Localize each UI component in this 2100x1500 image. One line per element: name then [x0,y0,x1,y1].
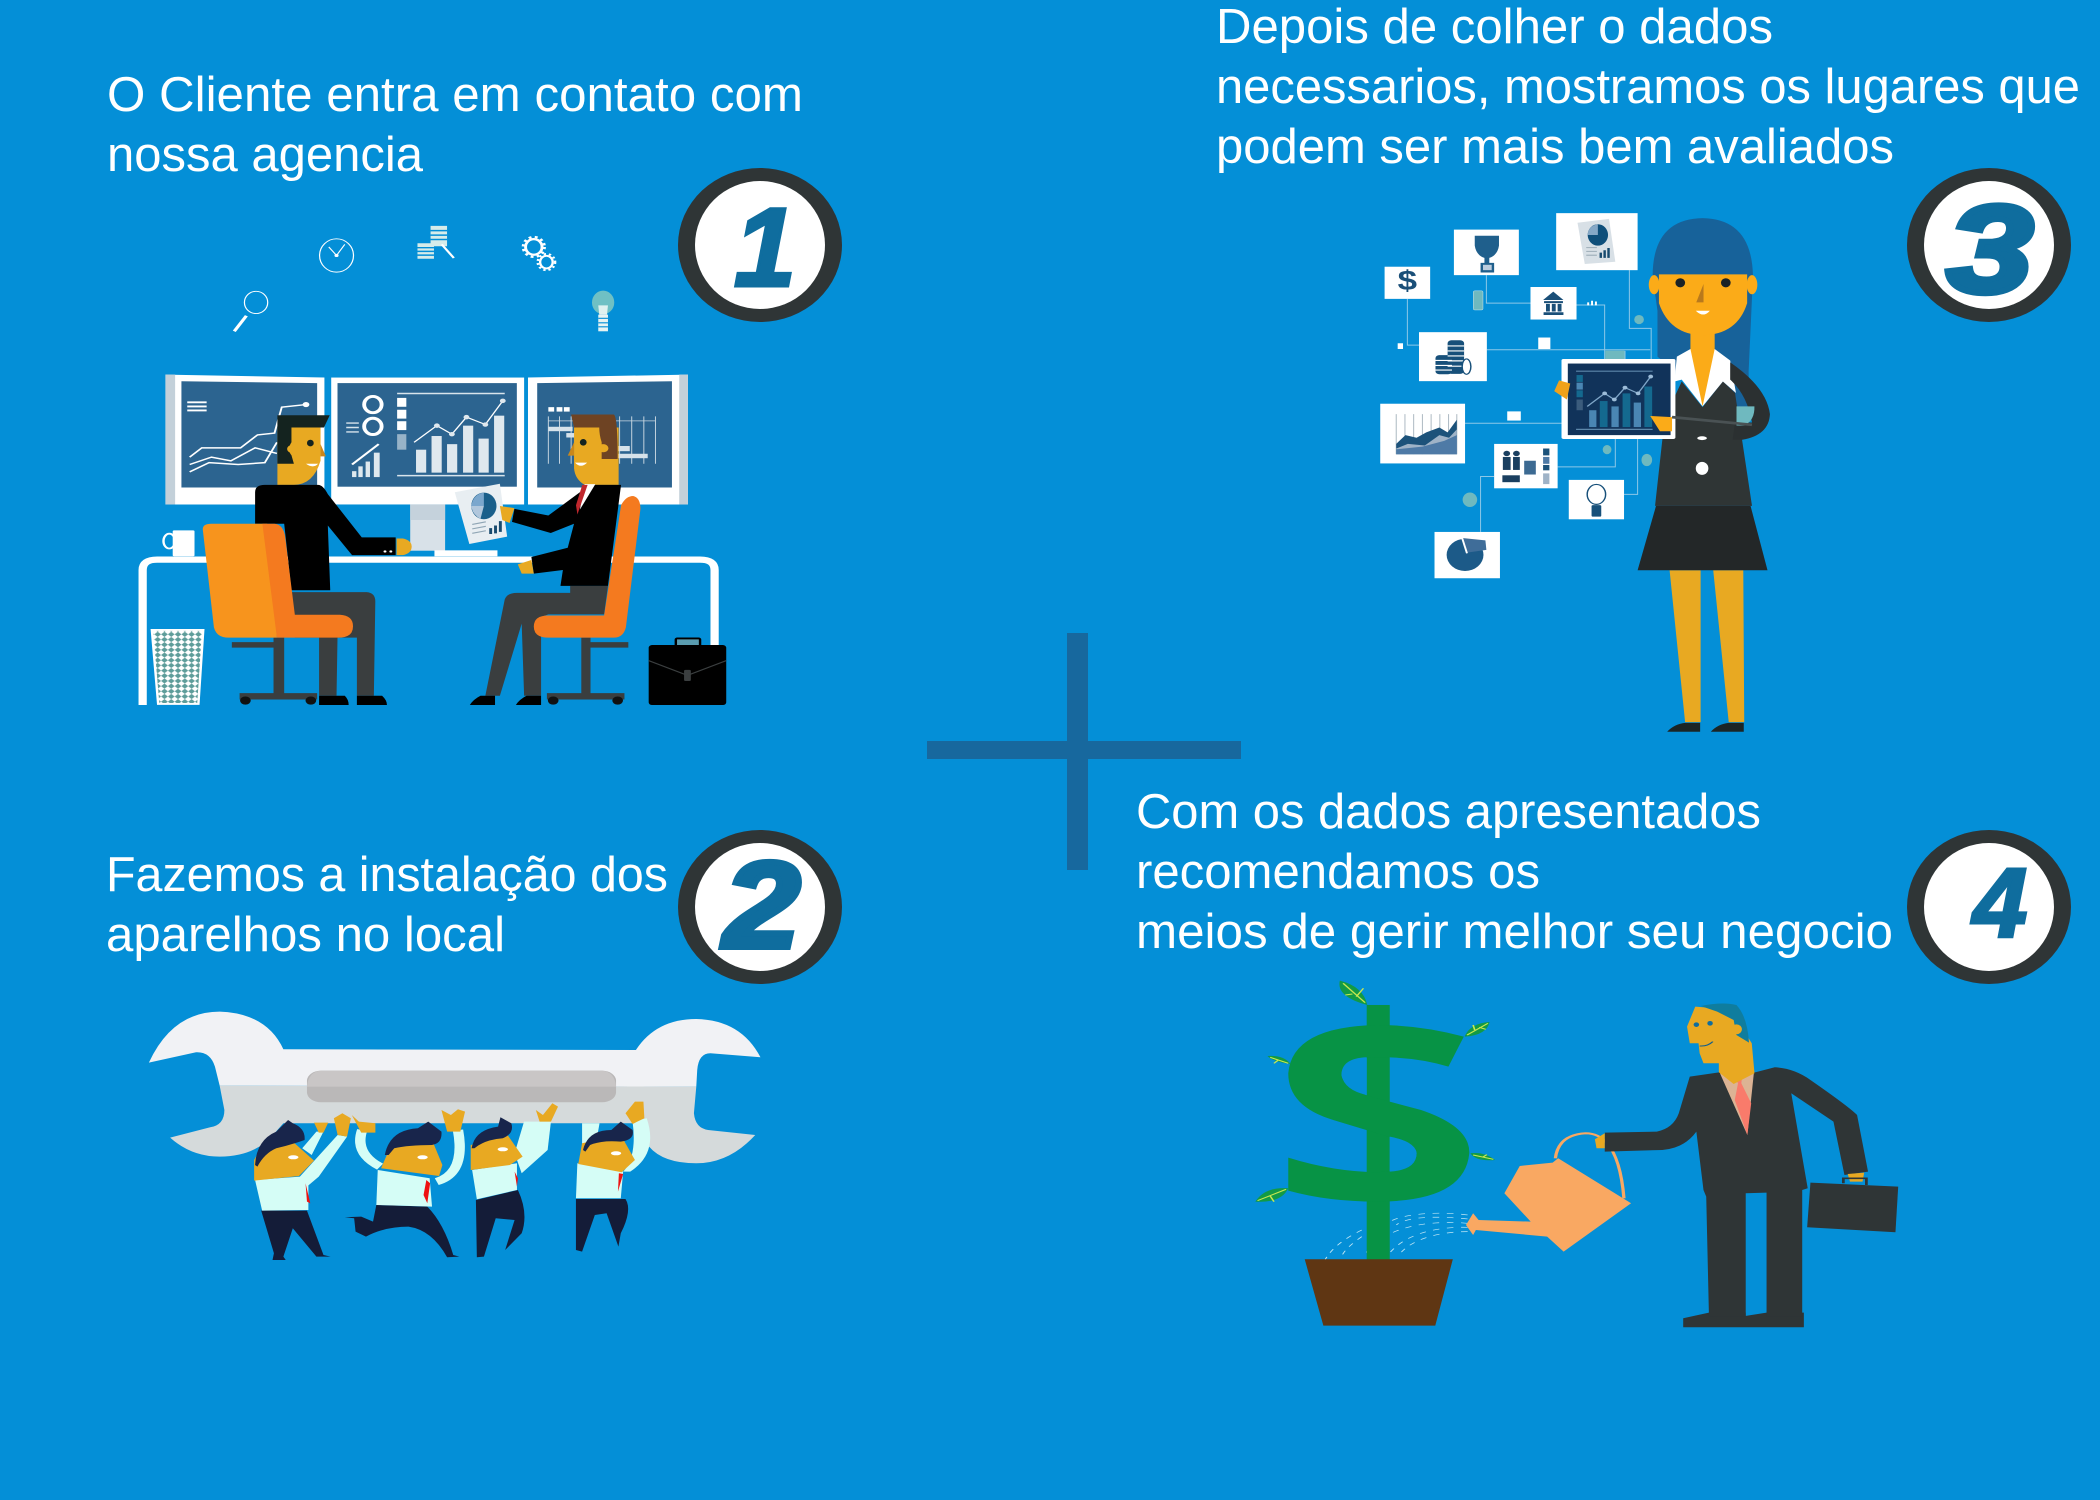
flower pot [1305,1259,1453,1326]
card: bank [1530,287,1577,320]
card: trophy [1454,230,1519,275]
small teal icons [1463,291,1652,507]
businessman briefcase [1807,1178,1898,1232]
heading: step 4: recomendamos os [1136,845,1540,899]
number badge 4 [1907,830,2071,984]
heading: step 2 [106,848,668,962]
card: dollar [1385,266,1430,299]
illustration: step 4 money plant and businessman [1255,981,1898,1327]
worker 1 [254,1113,351,1260]
number badge 1 [678,168,842,322]
chair right [534,496,640,705]
center monitor [331,378,524,556]
heading: step 3 [1216,0,2080,174]
person left [255,415,412,705]
heading: step 1: O Cliente entra em contato com [107,68,803,122]
tablet [1562,359,1675,439]
left monitor [165,375,324,504]
worker 3 [471,1103,558,1257]
heading: step 3: podem ser mais bem avaliados [1216,120,1894,174]
water spray [1325,1213,1468,1260]
worker 2 [345,1109,465,1257]
illustration: step 1 office scene [143,226,726,705]
wrench [149,1012,760,1163]
icon: gears [523,237,555,270]
heading: step 2: Fazemos a instalação dos [106,848,668,902]
number badge 4: 4 [1971,848,2027,958]
illustration: step 3 woman with data [1380,213,1770,732]
card: people [1494,444,1558,488]
illustration: step 2 team lifting wrench [149,1012,760,1260]
icon: clock [320,239,353,272]
number badge 3 [1907,168,2071,322]
desk [143,560,715,705]
card: area chart [1380,404,1465,463]
card: pie [1435,532,1500,578]
woman: hands and arm [1554,362,1770,440]
worker 4 [576,1102,650,1252]
report document [455,484,514,544]
number badge 1: 1 [734,185,796,310]
woman: dress [1638,382,1768,570]
icon: coins [417,226,454,259]
dollar sign plant [1288,1005,1469,1260]
wastebasket [152,630,203,704]
person right [470,415,621,705]
woman: hair back [1653,218,1753,418]
plus sign divider [927,633,1241,870]
card: bulb [1569,480,1624,519]
card: report [1556,213,1638,270]
woman: legs and shoes [1667,570,1744,732]
heading: step 2: aparelhos no local [106,908,505,962]
card: dollar: $ [1398,266,1418,296]
heading: step 1 [107,68,803,182]
woman: collar [1674,349,1736,406]
right monitor [528,375,688,504]
chair left [203,524,353,705]
connector lines [1407,270,1651,532]
briefcase [649,638,726,705]
small white icons [1398,301,1597,421]
number badge 2 [678,830,842,984]
number badge 3: 3 [1947,180,2033,319]
businessman [1595,1004,1868,1327]
heading: step 3: necessarios, mostramos os lugares que [1216,60,2080,114]
heading: step 4: meios de gerir melhor seu negocio [1136,905,1893,959]
icon: light bulb [592,291,614,331]
heading: step 4: Com os dados apresentados [1136,785,1761,839]
icon: magnifier [234,291,268,331]
woman: head [1649,274,1757,406]
mug [163,530,195,556]
card: coins [1419,332,1487,381]
heading: step 4 [1136,785,1893,959]
watering can [1466,1133,1631,1252]
leaves [1255,981,1495,1202]
heading: step 3: Depois de colher o dados [1216,0,1773,54]
heading: step 1: nossa agencia [107,128,424,182]
number badge 2: 2 [721,838,800,973]
